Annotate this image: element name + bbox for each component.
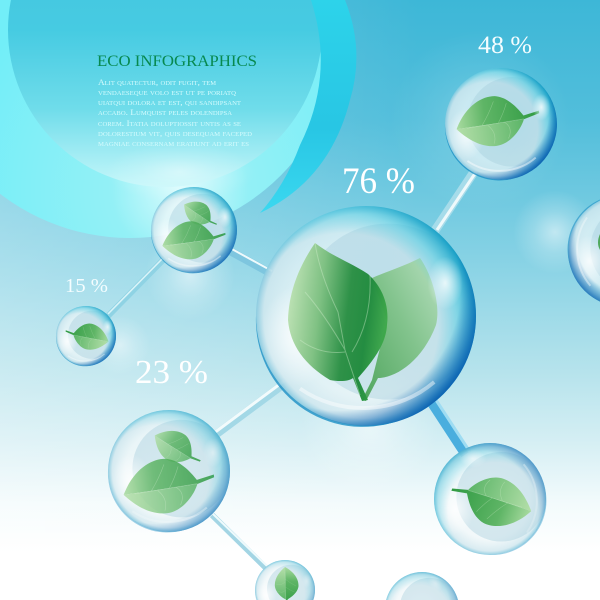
label: 15 percent: 15 % bbox=[65, 275, 108, 297]
text block: description: Alit quatectur, odit fugit, tem bbox=[98, 77, 217, 87]
bubble: 23 percent bbox=[108, 410, 230, 532]
text block: description: accabo. Lumquist peles dolendipsa bbox=[98, 107, 233, 117]
text block: description: dolorestium vit, quis desequam faceped bbox=[98, 128, 253, 138]
bubble: bottom partial bbox=[370, 557, 474, 600]
title: ECO INFOGRAPHICS bbox=[97, 53, 257, 70]
connector: top-left bubble to main bubble bbox=[228, 248, 272, 274]
icon: large leaf bbox=[120, 453, 218, 518]
icon: leaf bbox=[275, 567, 299, 600]
icon: leaf bbox=[445, 463, 538, 537]
bubble: top left with two leaves bbox=[151, 187, 237, 273]
text block: description: uiatqui dolora et est, qui sandipsant bbox=[98, 97, 241, 107]
bubble: right edge partial bbox=[568, 195, 600, 307]
bubble: 15 percent bbox=[56, 306, 116, 366]
label: 48 percent: 48 % bbox=[478, 32, 532, 59]
text block: description bbox=[98, 77, 253, 148]
panel: large cyan title circle bbox=[0, 0, 356, 238]
bubble: bottom centre bbox=[255, 560, 315, 600]
bubble: lower right bbox=[434, 443, 546, 555]
bubble: main with two leaves bbox=[256, 206, 476, 427]
connector: main bubble to 48% bubble bbox=[434, 172, 476, 232]
icon: leaf bbox=[453, 91, 543, 150]
icon: back leaf bbox=[362, 258, 437, 401]
text block: description: magniae consernam eratiunt ad erit es bbox=[98, 138, 249, 148]
connector: top-left bubble to 15% bubble bbox=[108, 258, 165, 316]
bubble: 48 percent bbox=[445, 68, 557, 180]
label: 23 percent: 23 % bbox=[135, 354, 208, 391]
icon: front leaf bbox=[288, 243, 387, 401]
icon: leaf bbox=[63, 320, 111, 353]
connector: main bubble to 23% bubble bbox=[214, 381, 284, 436]
icon: large leaf bbox=[160, 218, 228, 262]
text block: description: corem. Itatia doluptiossit untis as se bbox=[98, 118, 241, 128]
connector: main bubble to lower-right bubble bbox=[432, 400, 470, 454]
connector: 23% bubble to bottom bubble bbox=[212, 514, 267, 568]
label: 76 percent: 76 % bbox=[342, 161, 415, 202]
icon: small leaf bbox=[147, 421, 208, 476]
text block: description: vendaeseque volo est ut pe poriatq bbox=[98, 87, 237, 97]
icon: small leaf bbox=[178, 194, 222, 235]
